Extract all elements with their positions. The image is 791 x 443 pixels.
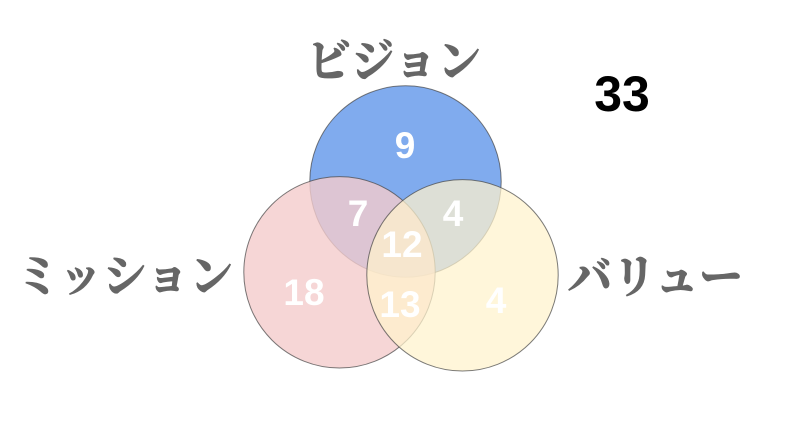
label: mission: ミッション [16,250,233,302]
label: vision: ビジョン [307,35,481,87]
count: all three: 12 [381,224,423,265]
count: vision only: 9 [395,125,415,166]
circle: mission [244,177,435,368]
circle: value [367,180,558,371]
count: vision and mission: 7 [348,193,368,234]
count: mission only: 18 [283,272,325,313]
count: value only: 4 [486,280,507,321]
total count: 33 [594,66,650,122]
circle: vision [310,86,501,277]
count: mission and value: 13 [379,284,421,325]
label: value: バリュー [568,251,743,303]
count: vision and value: 4 [443,193,464,234]
